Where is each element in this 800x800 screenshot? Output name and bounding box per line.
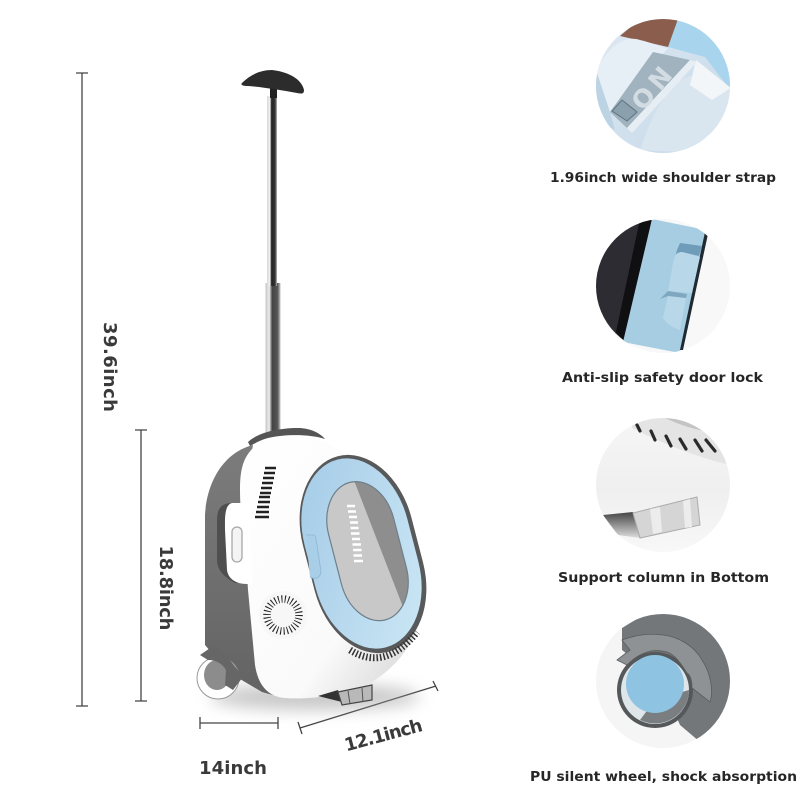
- blue hub: [626, 655, 684, 713]
- wheel rim: [617, 652, 693, 728]
- white side handle tab: [225, 503, 252, 584]
- door lock tab: [306, 535, 321, 578]
- photo: support column: [596, 418, 730, 552]
- handle recess: [217, 503, 240, 583]
- caption: Support column in Bottom: [558, 571, 769, 586]
- telescopic handle: [241, 70, 304, 433]
- grey back shell: [205, 445, 280, 697]
- strap with printed letters: ON: [626, 57, 681, 116]
- photo: PU wheel: [596, 614, 730, 748]
- dimension: body height 18.8inch: 18.8inch: [155, 546, 176, 630]
- photo: shoulder strap: [596, 19, 732, 155]
- photo: door lock: [596, 220, 708, 352]
- ground shadow: [210, 684, 420, 710]
- fender: [617, 634, 712, 702]
- vent slots: [637, 425, 715, 451]
- caption: 1.96inch wide shoulder strap: [550, 171, 776, 186]
- dimension: width 14inch: 14inch: [199, 758, 267, 779]
- product illustration: pet carrier trolley: [197, 70, 443, 710]
- dimension: total height 39.6inch: 39.6inch: [99, 322, 120, 412]
- caption: PU silent wheel, shock absorption: [530, 770, 797, 785]
- caption: Anti-slip safety door lock: [562, 371, 763, 386]
- feature 4: PU wheel: [530, 605, 797, 785]
- vent band beneath ring: [350, 632, 417, 658]
- vent slots: [255, 468, 276, 517]
- transparent foot: [633, 497, 700, 538]
- feature 3: support column: [558, 418, 769, 586]
- window outline: [317, 474, 418, 628]
- latch: [676, 243, 702, 256]
- dark gap: [603, 512, 640, 538]
- window air slots: [347, 506, 363, 561]
- dimension: depth 12.1inch: [298, 681, 438, 756]
- dimension: body height 18.8inch: [135, 430, 176, 701]
- dimension: total height 39.6inch: [76, 73, 120, 706]
- rear wheel: [197, 646, 243, 699]
- dimension: depth 12.1inch: 12.1inch: [342, 715, 425, 756]
- support column foot: [318, 685, 372, 705]
- window: [327, 482, 408, 620]
- side handle grip: [232, 527, 242, 562]
- dimension: width 14inch: [199, 717, 278, 779]
- fan grille: [259, 591, 307, 639]
- dark ring backing: [283, 442, 443, 666]
- top cap: [248, 428, 325, 446]
- grey housing: [622, 614, 730, 739]
- white shell: [240, 436, 424, 698]
- feature 2: door lock: [562, 219, 763, 386]
- blue door ring: [286, 446, 437, 661]
- feature 1: shoulder strap: [550, 19, 776, 186]
